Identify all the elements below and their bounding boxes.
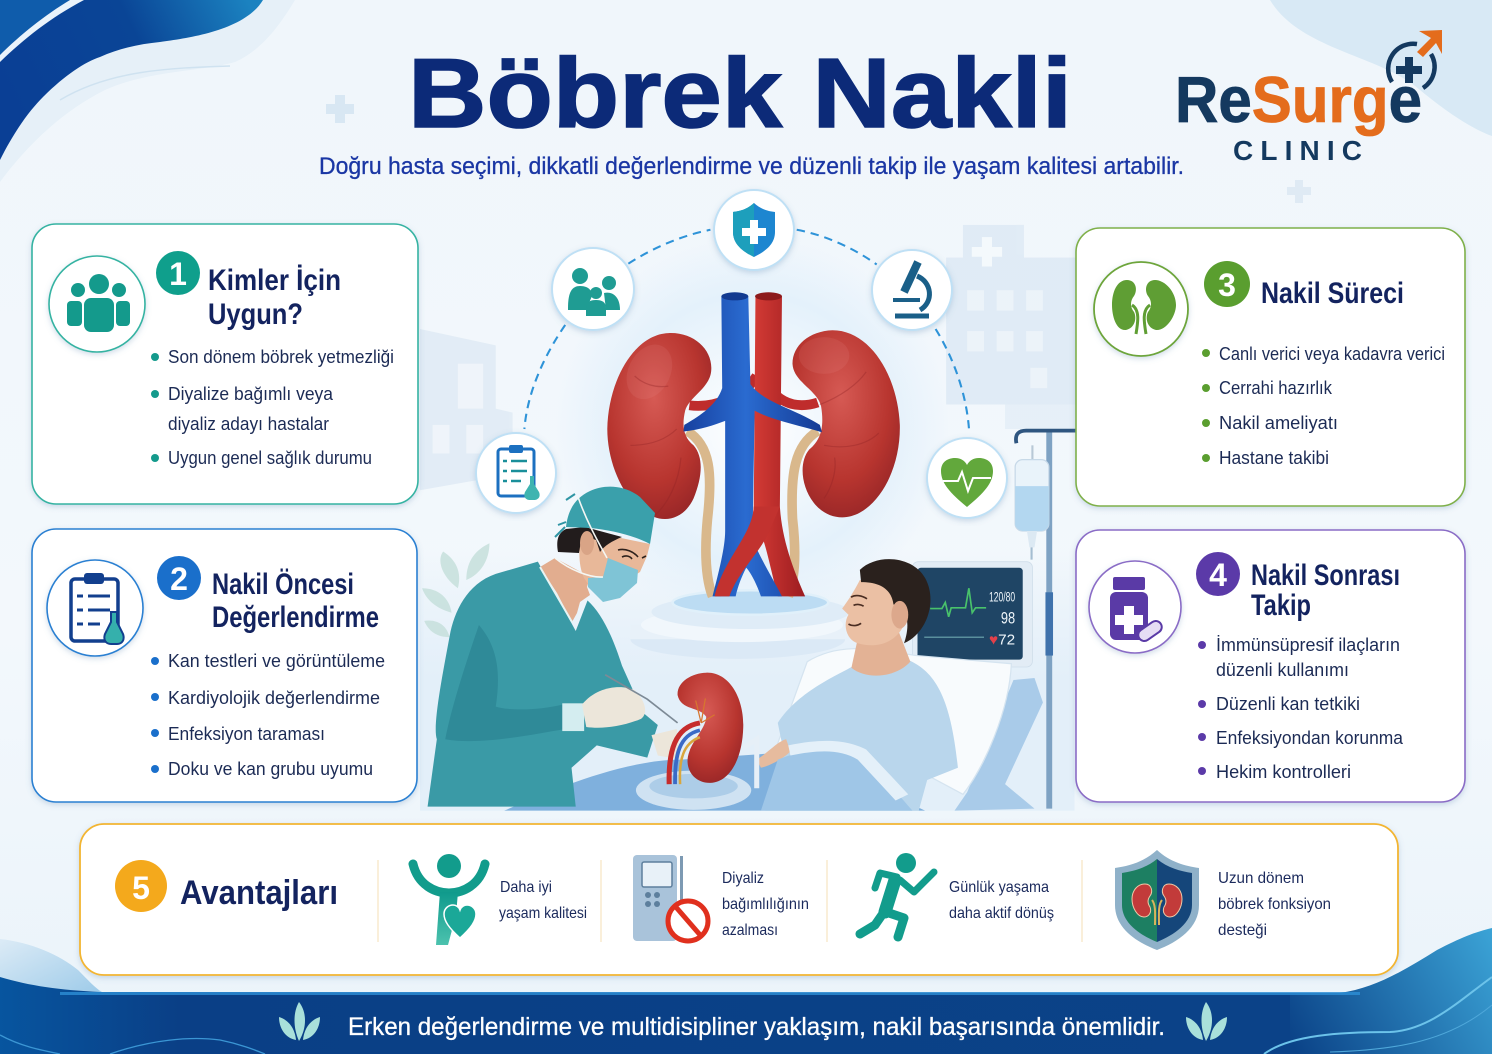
number badge: 3 bbox=[1218, 267, 1236, 303]
footer message: Erken değerlendirme ve multidisipliner yaklaşım, nakil başarısında önemlidir. bbox=[348, 1013, 1165, 1041]
benefit: long-term kidney function bbox=[1115, 850, 1331, 950]
icon bubble: shield bbox=[714, 190, 794, 270]
card background bbox=[80, 824, 1398, 975]
footer base bbox=[0, 977, 1492, 1054]
collar bbox=[540, 567, 572, 622]
icon: clipboard bbox=[47, 560, 143, 656]
panel 2: Nakil Öncesi Değerlendirme bbox=[32, 529, 417, 802]
mask strings bbox=[555, 497, 607, 577]
panel 3: Nakil Süreci bbox=[1076, 228, 1465, 506]
faint hospital right bbox=[946, 225, 1077, 429]
scrubs bbox=[428, 562, 658, 807]
decorative plus left bbox=[326, 95, 354, 123]
kidney model stand bbox=[636, 739, 757, 810]
renal arteries bbox=[689, 376, 818, 406]
bullet list: Hastane takibi bbox=[1219, 448, 1329, 468]
icon: people bbox=[49, 256, 145, 352]
number badge bbox=[1204, 261, 1250, 307]
neck bbox=[540, 558, 590, 622]
left kidney bbox=[607, 333, 711, 519]
bullet list: İmmünsüpresif ilaçların bbox=[1216, 635, 1400, 655]
benefit text: Daha iyi bbox=[500, 879, 552, 896]
cap bbox=[566, 487, 655, 544]
benefit: quality of life bbox=[413, 854, 587, 945]
bullet list: Kan testleri ve görüntüleme bbox=[168, 651, 385, 671]
facial features bbox=[848, 596, 867, 626]
doctor body bbox=[428, 562, 681, 807]
kidney glow bbox=[555, 237, 950, 621]
iv stand bbox=[1015, 431, 1077, 809]
benefit: return to active life bbox=[860, 853, 1054, 937]
number badge: 1 bbox=[169, 256, 187, 292]
glove back hand bbox=[651, 729, 681, 760]
number badge: 4 bbox=[1209, 557, 1227, 593]
pillow bbox=[778, 649, 1011, 794]
logo clinic label: CLINIC bbox=[1233, 135, 1362, 166]
icon bubble: people bbox=[552, 248, 634, 330]
gown bbox=[765, 661, 958, 811]
left leg red overlay bbox=[715, 507, 780, 596]
card background bbox=[32, 529, 417, 802]
heading: Değerlendirme bbox=[212, 601, 379, 634]
heart rate reading: ♥72 bbox=[989, 632, 1015, 648]
icon: medicine bottle bbox=[1089, 561, 1181, 653]
heading: Avantajları bbox=[180, 874, 338, 912]
heading: Nakil Süreci bbox=[1261, 277, 1404, 310]
bullet list: Enfeksiyondan korunma bbox=[1216, 728, 1404, 748]
bullet list bbox=[1198, 635, 1404, 782]
logo wordmark: ReSurge bbox=[1175, 63, 1422, 136]
bullet list bbox=[151, 347, 394, 468]
ear bbox=[891, 601, 908, 629]
card background bbox=[1076, 530, 1465, 802]
scalpel bbox=[605, 675, 678, 723]
lower trace bbox=[924, 636, 984, 639]
bullet list: Enfeksiyon taraması bbox=[168, 724, 325, 744]
bullet list: Cerrahi hazırlık bbox=[1219, 378, 1333, 398]
cuff bbox=[562, 703, 584, 731]
number badge bbox=[115, 860, 167, 912]
mask bbox=[588, 558, 638, 602]
bullet list: Doku ve kan grubu uyumu bbox=[168, 759, 373, 779]
plant leaves bbox=[422, 543, 489, 637]
ecg line bbox=[930, 588, 986, 617]
blanket fold bbox=[788, 741, 908, 800]
bullet list bbox=[151, 651, 385, 779]
icon: kidneys bbox=[1094, 262, 1188, 356]
patient arm bbox=[757, 739, 790, 768]
bullet list: düzenli kullanımı bbox=[1216, 660, 1349, 680]
panel 4: Nakil Sonrası Takip bbox=[1076, 530, 1465, 802]
hair bbox=[860, 559, 930, 643]
face bbox=[579, 530, 650, 590]
bullet list: Kardiyolojik değerlendirme bbox=[168, 688, 380, 708]
benefit text: Diyaliz bbox=[722, 870, 764, 887]
footer band bbox=[0, 928, 1492, 1054]
heading: Uygun? bbox=[208, 298, 303, 331]
logo: ReSurge Clinic bbox=[1175, 30, 1442, 166]
floor tint bbox=[420, 547, 1074, 811]
footer leaves right bbox=[1186, 1002, 1227, 1041]
number badge bbox=[157, 556, 201, 600]
patient monitor bbox=[912, 562, 1032, 667]
bullet list: Düzenli kan tetkiki bbox=[1216, 694, 1360, 714]
benefit text: Günlük yaşama bbox=[949, 879, 1049, 896]
footer leaves left bbox=[279, 1002, 320, 1041]
kidney model bbox=[669, 673, 743, 784]
title: Böbrek Nakli bbox=[408, 38, 1072, 148]
ureters bbox=[687, 431, 818, 596]
bullet list: Nakil ameliyatı bbox=[1219, 413, 1338, 433]
logo plus mark bbox=[1388, 30, 1442, 88]
card background bbox=[1076, 228, 1465, 506]
benefit text: böbrek fonksiyon bbox=[1218, 896, 1331, 913]
benefit text: bağımlılığının bbox=[722, 896, 809, 913]
cap ties bbox=[555, 494, 575, 537]
icon: person with heart bbox=[413, 854, 485, 945]
doctor head bbox=[540, 487, 655, 622]
bullet list: Uygun genel sağlık durumu bbox=[168, 448, 372, 468]
heading: Takip bbox=[1251, 589, 1311, 622]
icon: dialysis machine with no sign bbox=[633, 855, 708, 941]
heading: Kimler İçin bbox=[208, 264, 341, 297]
oxygen reading: 98 bbox=[1001, 609, 1015, 627]
blood pressure reading: 120/80 bbox=[989, 588, 1015, 604]
dividers bbox=[378, 860, 1082, 942]
heading: Nakil Sonrası bbox=[1251, 559, 1400, 592]
ear bbox=[580, 531, 594, 555]
subtitle: Doğru hasta seçimi, dikkatli değerlendirme ve düzenli takip ile yaşam kalitesi artabilir. bbox=[319, 153, 1184, 180]
card background bbox=[32, 224, 418, 504]
glove front hand bbox=[582, 687, 645, 728]
decorative plus right bbox=[1287, 180, 1311, 203]
right rising wave bbox=[1290, 928, 1492, 1054]
top right wave bbox=[1270, 0, 1492, 136]
icon bubble: microscope bbox=[872, 250, 952, 330]
patient bbox=[757, 559, 958, 811]
icon: runner bbox=[860, 853, 934, 937]
face bbox=[842, 580, 912, 645]
dashed arc bbox=[524, 230, 969, 433]
bullet list bbox=[1202, 344, 1445, 468]
vena cava blue vessel bbox=[683, 292, 822, 596]
bullet list: diyaliz adayı hastalar bbox=[168, 414, 329, 434]
panel 1: Kimler İçin Uygun? bbox=[32, 224, 418, 504]
bullet list: Hekim kontrolleri bbox=[1216, 762, 1351, 782]
benefit text: azalması bbox=[722, 922, 778, 939]
sleeve shading bbox=[445, 625, 565, 741]
benefit text: Uzun dönem bbox=[1218, 870, 1304, 887]
number badge bbox=[1196, 552, 1240, 596]
bottom left wave bbox=[0, 939, 102, 992]
central illustration bbox=[420, 225, 1077, 811]
bullet list: Son dönem böbrek yetmezliği bbox=[168, 347, 394, 367]
hair bbox=[557, 527, 622, 553]
icon bubble: clipboard bbox=[476, 433, 556, 513]
top left wave bbox=[0, 0, 295, 182]
benefit text: desteği bbox=[1218, 922, 1267, 939]
benefit text: daha aktif dönüş bbox=[949, 905, 1054, 922]
benefit text: yaşam kalitesi bbox=[499, 905, 587, 922]
bullet list: Canlı verici veya kadavra verici bbox=[1219, 344, 1445, 364]
heading: Nakil Öncesi bbox=[212, 568, 354, 601]
bed frame bbox=[955, 678, 1043, 811]
icon: kidney shield bbox=[1115, 850, 1199, 950]
number badge: 2 bbox=[170, 561, 188, 597]
footer waves bbox=[0, 1035, 265, 1054]
icon bubble: heart bbox=[927, 438, 1007, 518]
aorta red vessel bbox=[715, 292, 805, 596]
neck bbox=[851, 629, 910, 676]
number badge bbox=[156, 251, 200, 295]
blanket bbox=[761, 748, 912, 811]
panel 5: Avantajları bbox=[80, 824, 1398, 975]
eyes and brow bbox=[618, 549, 646, 559]
number badge: 5 bbox=[132, 870, 150, 906]
benefit: reduced dialysis dependence bbox=[633, 855, 809, 941]
right kidney bbox=[792, 330, 900, 517]
bullet list: Diyalize bağımlı veya bbox=[168, 384, 334, 404]
pedestal bbox=[630, 590, 849, 659]
surgical table sheet bbox=[504, 751, 925, 811]
faint hospital left bbox=[420, 329, 513, 490]
